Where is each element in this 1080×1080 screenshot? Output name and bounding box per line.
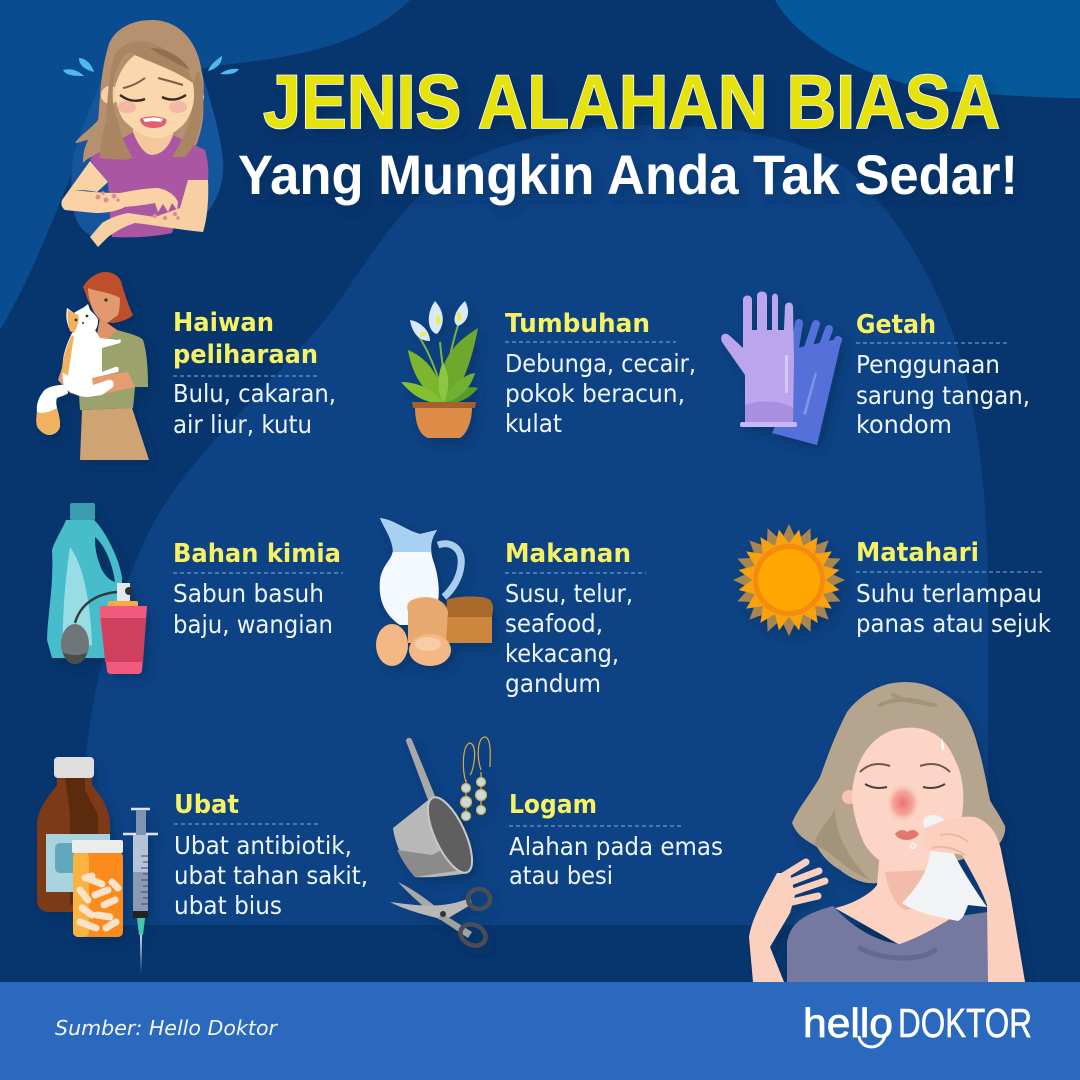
text block: Bulu, cakaran,	[173, 379, 336, 408]
back hair	[75, 20, 204, 163]
text block: air liur, kutu	[173, 410, 312, 439]
text block: pokok beracun,	[505, 379, 685, 408]
cheeks and features	[118, 101, 136, 113]
heading: Makanan	[505, 539, 631, 569]
title: JENIS ALAHAN BIASA	[263, 60, 1000, 145]
text block: sarung tangan,	[856, 381, 1030, 410]
heading: Ubat	[174, 790, 239, 820]
text block: Penggunaan	[856, 350, 1000, 379]
panel: Getah	[721, 292, 1030, 445]
front hair locks	[100, 41, 193, 160]
text block: ubat bius	[174, 891, 282, 920]
ears	[101, 86, 119, 104]
text block	[505, 349, 696, 438]
face	[115, 55, 194, 138]
title	[238, 60, 1018, 206]
text block: Alahan pada emas	[509, 832, 723, 861]
panel: Bahan kimia	[47, 503, 343, 674]
icon: milk jug, bread and eggs	[376, 518, 493, 666]
logo: hello doktor: DOKTOR	[898, 1000, 1032, 1046]
heading: Getah	[856, 310, 936, 340]
illustration: woman scratching rash	[61, 20, 239, 247]
text block: atau besi	[509, 861, 613, 890]
text block	[173, 579, 333, 639]
text block: Debunga, cecair,	[505, 349, 696, 378]
rash	[96, 191, 180, 220]
heading: Matahari	[856, 538, 979, 568]
icon: medicine bottles and syringe	[37, 757, 158, 973]
text block	[856, 579, 1052, 638]
icon: potted plant	[401, 301, 478, 438]
sweat drops	[63, 56, 239, 76]
text block: Suhu terlampau	[856, 579, 1042, 608]
text block: ubat tahan sakit,	[174, 861, 368, 890]
text block: Sabun basuh	[173, 579, 324, 608]
neck	[133, 122, 173, 155]
illustration: woman sneezing with tissue	[749, 682, 1025, 982]
icon: detergent and perfume bottles	[47, 503, 147, 674]
panel: Ubat	[37, 757, 368, 973]
panel: Matahari	[728, 519, 1052, 641]
heading: Tumbuhan	[505, 309, 650, 339]
text block: gandum	[505, 669, 601, 698]
text block	[173, 379, 336, 439]
heading: Bahan kimia	[173, 539, 341, 569]
panel: Logam	[390, 737, 723, 950]
icon: woman holding cat	[36, 272, 149, 460]
text block: Ubat antibiotik,	[174, 831, 352, 860]
icon: sun	[728, 519, 850, 641]
text block: Susu, telur,	[505, 579, 633, 608]
text block: kondom	[856, 410, 952, 439]
text block	[856, 350, 1030, 439]
panel: Makanan	[376, 518, 646, 698]
icon: pot, earrings and scissors	[390, 737, 490, 950]
text block	[509, 832, 723, 890]
heading: peliharaan	[173, 340, 318, 370]
text block: kekacang,	[505, 639, 619, 668]
logo: hello doktor	[803, 1000, 1032, 1047]
arms	[90, 180, 208, 247]
text block: baju, wangian	[173, 610, 333, 639]
text block: kulat	[505, 409, 562, 438]
panel: Haiwan peliharaan	[36, 272, 336, 460]
blue blob behind woman	[71, 73, 223, 238]
source note: Sumber: Hello Doktor	[55, 1016, 279, 1040]
text block	[505, 579, 633, 698]
panel: Tumbuhan	[401, 301, 696, 438]
text block: panas atau sejuk	[856, 609, 1052, 638]
heading	[173, 308, 318, 370]
text block: seafood,	[505, 609, 603, 638]
title: Yang Mungkin Anda Tak Sedar!	[238, 143, 1018, 206]
shirt	[90, 132, 208, 237]
icon: rubber gloves	[721, 292, 842, 445]
footer bar	[0, 982, 1080, 1080]
heading: Haiwan	[173, 308, 274, 338]
heading: Logam	[509, 790, 597, 820]
text block	[174, 831, 368, 920]
logo: hello doktor: hello	[803, 1000, 893, 1046]
